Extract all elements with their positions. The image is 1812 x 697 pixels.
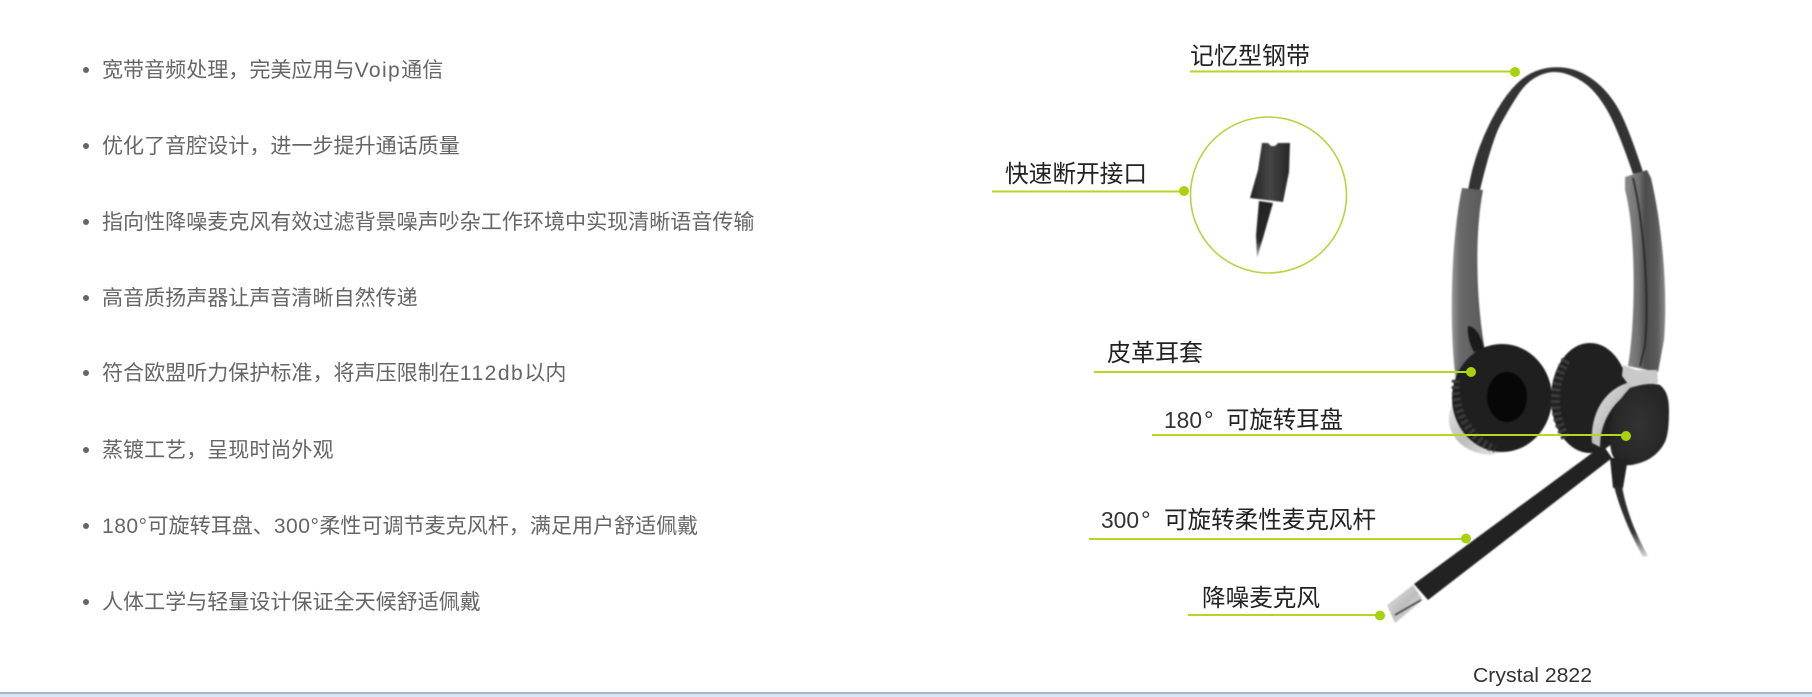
callout: noise-cancelling microphone <box>1188 585 1385 620</box>
feature list: 符合欧盟听力保护标准，将声压限制在112db以内 <box>102 362 566 385</box>
feature: speaker <box>83 287 418 310</box>
feature: noise-cancelling microphone <box>83 211 754 234</box>
feature list: 宽带音频处理，完美应用与Voip通信 <box>102 59 443 82</box>
bottom bar <box>0 692 1812 697</box>
feature list: 高音质扬声器让声音清晰自然传递 <box>102 287 418 310</box>
callout: rotating boom: 300 <box>1101 507 1139 533</box>
ear cap <box>1610 384 1669 465</box>
feature list: 指向性降噪麦克风有效过滤背景噪声吵杂工作环境中实现清晰语音传输 <box>102 211 754 234</box>
callout: rotating ear cup: ° <box>1204 407 1214 434</box>
headset illustration <box>1387 67 1669 623</box>
strain relief and cable <box>1610 458 1648 557</box>
right slider <box>1625 170 1665 372</box>
callout: rotating ear cup: 可旋转耳盘 <box>1226 407 1343 434</box>
right slider seam <box>1633 178 1647 366</box>
left slider inner pad <box>1468 326 1484 352</box>
callout: rotating boom: ° <box>1141 507 1151 534</box>
feature: wideband audio <box>83 58 443 82</box>
callout: leather ear pad <box>1094 340 1476 377</box>
feature list: 人体工学与轻量设计保证全天候舒适佩戴 <box>102 591 481 614</box>
connector plug <box>1250 143 1290 258</box>
callout: rotating ear cup: 180 <box>1164 407 1202 433</box>
microphone boom <box>1414 445 1612 600</box>
callout: memory steel band: 记忆型钢带 <box>1190 43 1310 70</box>
left slider <box>1452 188 1490 380</box>
callout: rotating ear cup <box>1152 407 1631 441</box>
microphone tip <box>1387 585 1423 623</box>
callout: noise-cancelling microphone: 降噪麦克风 <box>1202 585 1320 612</box>
feature: hearing protection <box>83 362 566 385</box>
headband <box>1468 67 1643 190</box>
callout: leather ear pad: 皮革耳套 <box>1107 340 1203 367</box>
silver arm <box>1592 365 1658 447</box>
left silver rim <box>1449 395 1510 455</box>
left ear cushion <box>1449 344 1552 455</box>
quick disconnect circle <box>1190 117 1346 273</box>
callout: rotating boom: 可旋转柔性麦克风杆 <box>1164 507 1376 534</box>
callout: quick disconnect: 快速断开接口 <box>1005 161 1147 188</box>
feature list: 优化了音腔设计，进一步提升通话质量 <box>102 135 460 158</box>
feature: acoustic chamber <box>83 135 460 158</box>
feature list <box>83 58 754 614</box>
feature list: 180°可旋转耳盘、300°柔性可调节麦克风杆，满足用户舒适佩戴 <box>102 515 698 538</box>
feature: rotation <box>83 514 698 538</box>
feature list: 蒸镀工艺，呈现时尚外观 <box>102 439 334 462</box>
model name: Crystal 2822 <box>1473 665 1592 687</box>
callout: memory steel band <box>1190 43 1520 77</box>
feature: ergonomics <box>83 590 481 614</box>
right ear cushion <box>1551 343 1629 453</box>
callout: quick disconnect <box>992 161 1189 196</box>
callout: rotating boom <box>1089 507 1471 544</box>
feature: plating <box>83 439 334 462</box>
